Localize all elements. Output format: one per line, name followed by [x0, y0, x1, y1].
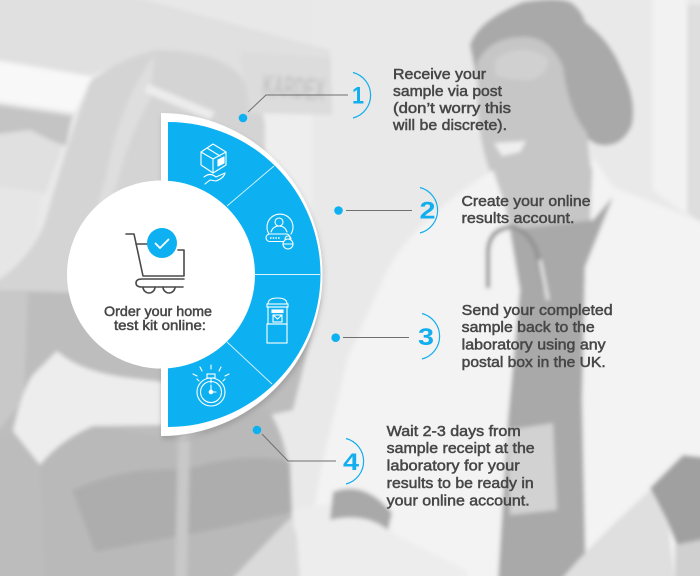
text 4: results to be ready in: [387, 476, 534, 492]
step 2: [334, 188, 590, 233]
arc 1: [353, 72, 371, 118]
dot 2: [334, 206, 343, 215]
columns and sign: [265, 112, 312, 300]
text 3: sample back to the: [462, 320, 595, 336]
icon: online account: [266, 214, 293, 249]
text 4: Wait 2-3 days from: [387, 424, 521, 440]
text 2: Create your online: [462, 194, 590, 210]
text 4: laboratory for your: [387, 458, 520, 474]
dot 1: [239, 114, 247, 122]
step 1: [239, 67, 511, 134]
connector 2: [346, 210, 412, 212]
hair of doctor: [470, 0, 633, 145]
dot 3: [331, 333, 340, 342]
text 1: will be discrete).: [392, 118, 507, 134]
icon: stopwatch: [193, 365, 229, 406]
half-circle step wheel: [67, 113, 322, 436]
blue segments: [168, 122, 320, 427]
arc 2: [420, 188, 438, 233]
text 1: (don’t worry this: [393, 101, 511, 117]
door frame: [653, 0, 687, 215]
text 4: sample receipt at the: [387, 441, 535, 457]
ceiling and beam: [0, 0, 333, 115]
dot 4: [253, 426, 261, 434]
photo sign text: KARDEX: [261, 69, 326, 107]
text 1: sample via post: [393, 84, 502, 100]
text 3: laboratory using any: [462, 338, 606, 354]
shirt and tie: [498, 197, 613, 576]
segment dividers: [227, 166, 320, 384]
text 2: results account.: [462, 211, 574, 227]
connector 1: [248, 95, 348, 112]
number 4: 4: [343, 449, 360, 476]
patient hand and cuff: [295, 500, 470, 576]
text 1: Receive your: [393, 67, 486, 83]
step 4: [253, 424, 535, 510]
arc 4: [346, 438, 364, 484]
text 3: Send your completed: [462, 303, 613, 319]
icon: shopping cart with check: [126, 228, 184, 293]
center label: test kit online:: [114, 317, 206, 333]
id badge: [507, 423, 557, 515]
step 3: [331, 303, 613, 371]
number 2: 2: [420, 198, 436, 224]
icon: parcel in hand: [201, 144, 226, 184]
white coat: [315, 157, 700, 576]
text 3: postal box in the UK.: [462, 355, 606, 371]
arc 3: [422, 314, 440, 359]
text 4: your online account.: [387, 494, 530, 510]
face and neck: [477, 37, 610, 232]
center white circle: [67, 180, 255, 368]
connector 3: [343, 336, 409, 338]
blonde hair: [0, 50, 320, 300]
number 3: 3: [418, 324, 434, 351]
number 1: 1: [352, 82, 364, 110]
right hand and cuff: [650, 455, 700, 545]
connector 4: [262, 434, 336, 461]
center label: Order your home: [104, 303, 212, 319]
white outer half disc: [161, 113, 322, 436]
stethoscope: [488, 227, 545, 290]
bright shelf top: [0, 60, 92, 112]
icon: post box: [267, 298, 288, 343]
patient sweater: [0, 290, 320, 576]
